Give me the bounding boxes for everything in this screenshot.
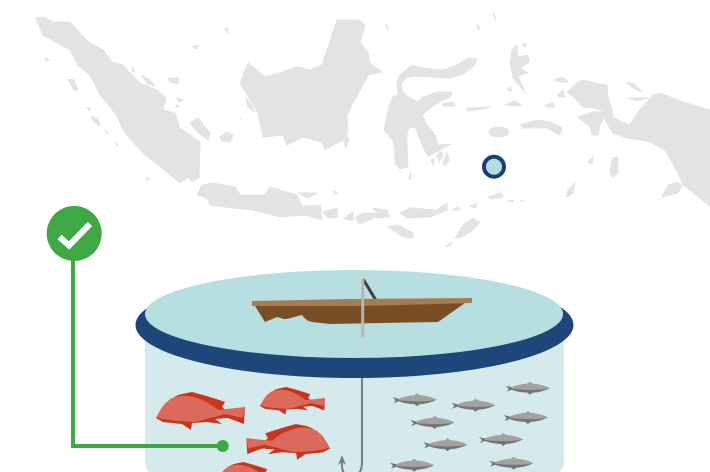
islands: Karimata and east Kalimantan <box>240 12 496 148</box>
school of red fish <box>156 387 330 472</box>
islands: Riau and Bangka Belitung <box>132 28 233 180</box>
islands: Aru and Kai <box>588 156 618 177</box>
gray fish 9 <box>489 457 533 470</box>
islands: Tanimbar <box>488 183 575 202</box>
icon: green check badge <box>47 206 102 261</box>
map of Indonesia <box>36 12 710 247</box>
island: Java <box>197 183 322 220</box>
island: Flores <box>400 203 447 218</box>
gray fish 8 <box>390 459 434 472</box>
gray fish 1 <box>393 393 437 406</box>
tank body <box>145 330 564 472</box>
dark blue rim <box>136 272 574 378</box>
red fish 4 <box>217 462 282 472</box>
red fish 1 <box>156 392 245 430</box>
islands: Alor <box>453 204 477 210</box>
islands: Maluku <box>505 77 648 107</box>
gray fish 6 <box>423 438 467 451</box>
island: New Guinea <box>567 80 710 206</box>
island: Seram <box>520 120 562 135</box>
gray fish 7 <box>479 433 523 446</box>
island: Sulawesi <box>384 58 477 169</box>
boat pole <box>363 279 377 302</box>
deck <box>252 298 472 306</box>
islands: around Sulawesi <box>409 102 491 180</box>
green callout connector <box>73 255 222 446</box>
map marker <box>484 157 504 177</box>
red fish 2 <box>260 387 325 415</box>
red fish 3 <box>246 424 330 460</box>
islands: west of Sumatra <box>45 58 118 146</box>
island: Sumatra <box>36 17 200 183</box>
island: Buru <box>489 127 509 137</box>
boat <box>252 279 472 337</box>
islands: Madura, Bali, Lombok <box>298 191 353 220</box>
island: Timor <box>445 218 480 247</box>
connector end dot <box>217 440 229 452</box>
island: Sumba <box>388 225 413 238</box>
mast <box>361 279 364 337</box>
school of gray fish <box>390 382 550 472</box>
water surface <box>145 270 563 358</box>
cylinder illustration: water column <box>136 270 574 472</box>
island: Halmahera <box>510 43 529 92</box>
gray fish 2 <box>451 399 495 412</box>
gray fish 3 <box>410 416 454 429</box>
hull <box>255 303 465 324</box>
island: Sumbawa <box>355 208 390 224</box>
island: Bomberai peninsula <box>578 112 607 135</box>
island: Kalimantan <box>240 20 382 150</box>
fishing line and hook <box>342 378 362 472</box>
gray fish 4 <box>506 382 550 395</box>
gray fish 5 <box>504 411 548 424</box>
island: Yos Sudarso <box>662 182 682 197</box>
hook barb <box>338 455 346 465</box>
